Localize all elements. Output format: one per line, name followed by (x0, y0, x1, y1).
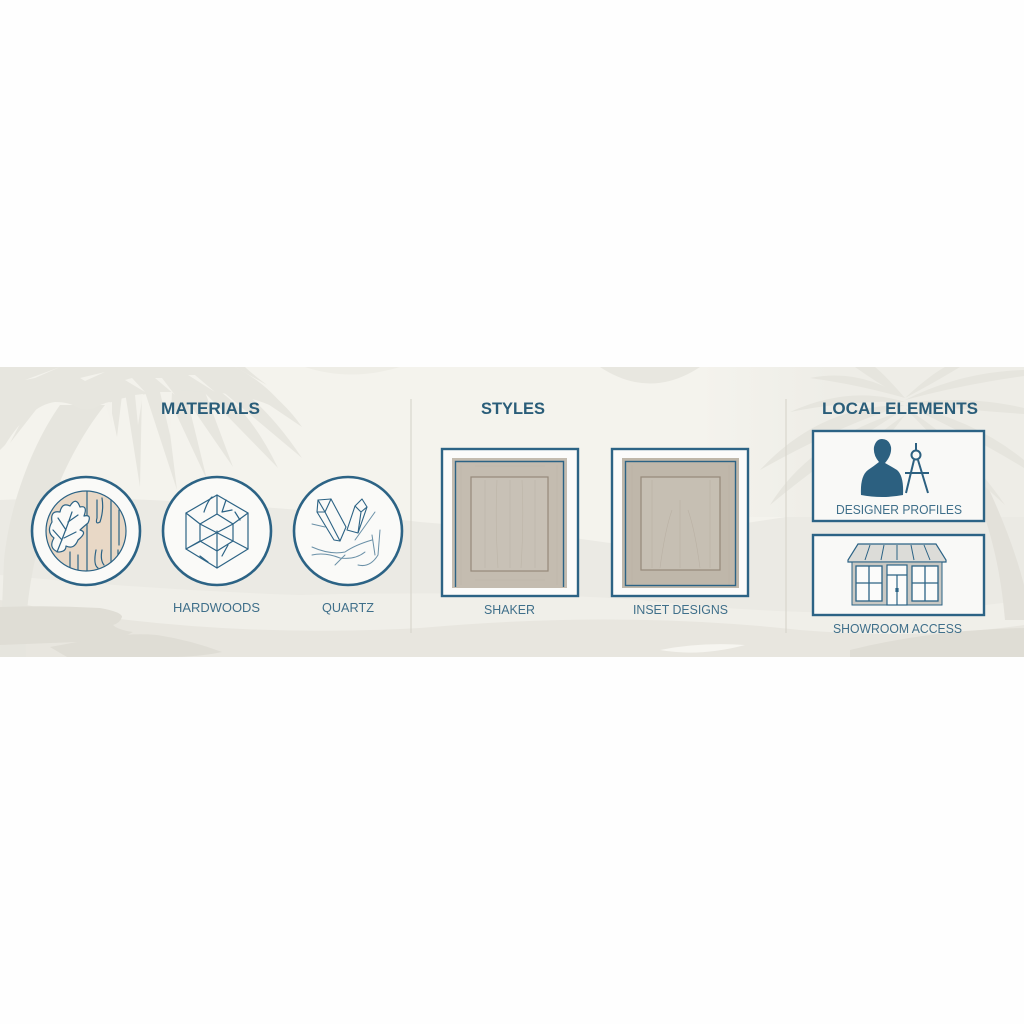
icon: quartz crystals (294, 477, 402, 585)
label: inset designs: INSET DESIGNS (633, 602, 728, 617)
banner background with tropical scenery (0, 367, 1024, 657)
shoreline shadows (0, 606, 1024, 657)
icon: oak leaf and wood grain (32, 477, 140, 585)
icon: designer and compass (861, 439, 929, 497)
heading: materials: MATERIALS (161, 399, 260, 418)
icon: hardwood geometric hexagon (163, 477, 271, 585)
section dividers (411, 399, 786, 633)
frond highlights in left crown (25, 367, 215, 435)
label: hardwoods: HARDWOODS (173, 600, 260, 615)
right palm tree (760, 367, 1024, 620)
left palm tree (0, 367, 302, 605)
beach highlight (660, 644, 745, 653)
label: designer profiles: DESIGNER PROFILES (836, 503, 962, 517)
label: shaker: SHAKER (484, 602, 535, 617)
label: showroom access: SHOWROOM ACCESS (833, 622, 962, 636)
icon: showroom storefront (848, 544, 946, 605)
heading: local elements: LOCAL ELEMENTS (822, 399, 978, 418)
label: quartz: QUARTZ (322, 600, 374, 615)
card: designer profiles (813, 431, 984, 521)
card: shaker door (442, 449, 578, 596)
card: showroom (813, 535, 984, 615)
card: inset door (612, 449, 748, 596)
heading: styles: STYLES (481, 399, 545, 418)
